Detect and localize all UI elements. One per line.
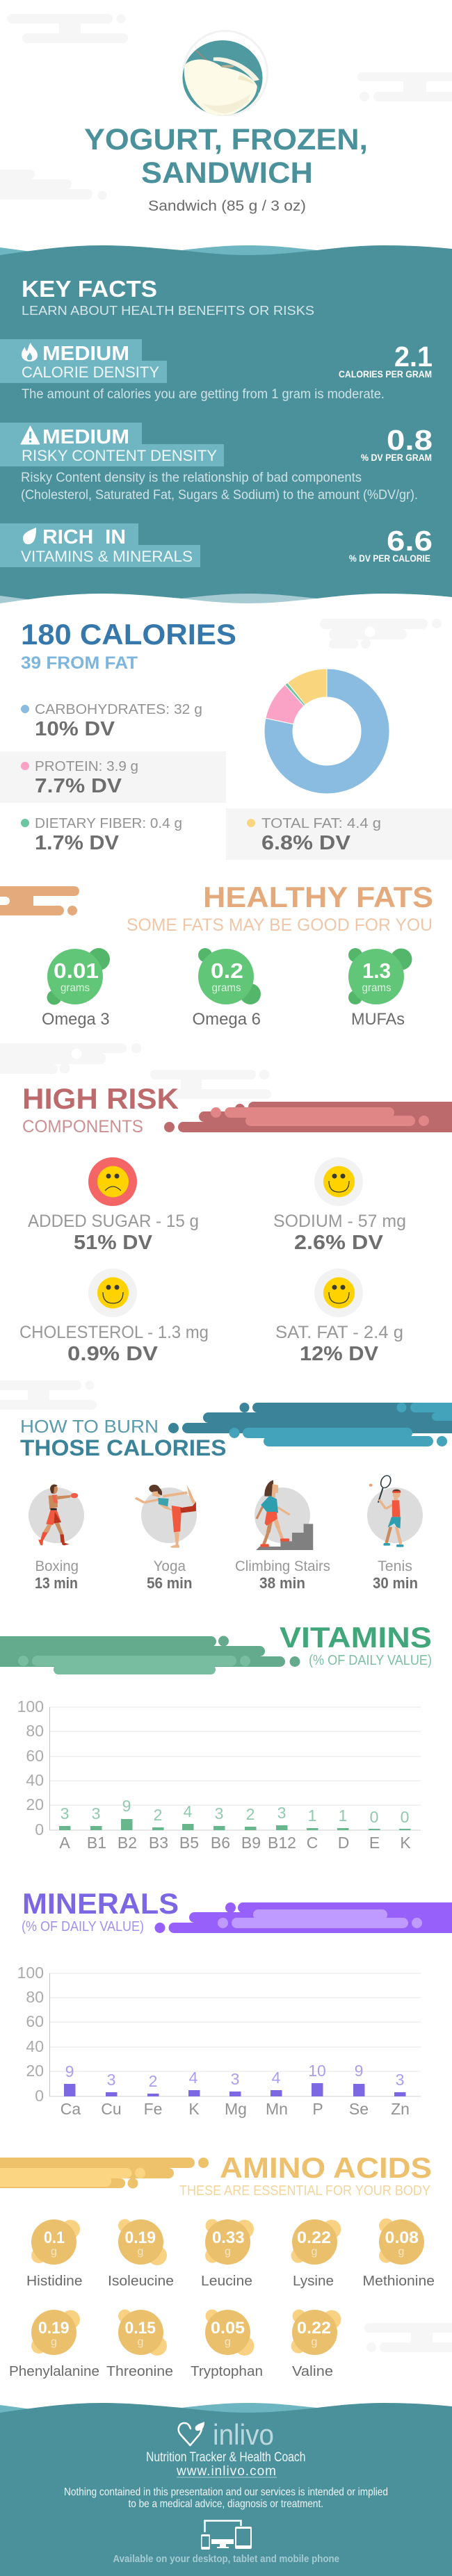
disclaimer (64, 2486, 388, 2510)
fact: calorie density: MEDIUM (42, 343, 129, 365)
panel: key facts (0, 245, 452, 616)
serving size: Sandwich (85 g / 3 oz) (148, 198, 306, 214)
bar chart: minerals: Fe (144, 2100, 162, 2118)
panel: minerals (17, 1887, 452, 2118)
bar chart: minerals: Ca (60, 2100, 81, 2118)
risk: saturated fat: 12% DV (300, 1343, 379, 1365)
bar chart: minerals: Se (349, 2100, 369, 2118)
calories heading: 39 FROM FAT (21, 653, 138, 673)
stat: omega 6 (192, 948, 261, 1029)
activity: boxing (29, 1484, 84, 1592)
stat: omega 6: 0.2 (211, 959, 243, 983)
icon: boxer (38, 1484, 78, 1545)
fact: rich in vitamins and minerals: RICH IN (42, 526, 126, 548)
key facts heading (22, 276, 314, 318)
bar chart: minerals: 2 (149, 2072, 157, 2090)
bar chart: minerals: 9 (355, 2062, 363, 2080)
components subheading: COMPONENTS (22, 1117, 143, 1136)
legend: total fat (226, 808, 452, 860)
minerals subheading: (% OF DAILY VALUE) (22, 1919, 144, 1934)
fact: rich in vitamins and minerals: VITAMINS & MINERALS (21, 548, 193, 565)
bar chart: vitamins: 100 (17, 1697, 44, 1715)
amino: leucine: 0.33 (212, 2228, 245, 2247)
decorative red banner (164, 1102, 452, 1132)
icon: leaf (23, 528, 36, 544)
activity: boxing: Boxing (35, 1558, 79, 1574)
risk: added sugar (28, 1157, 199, 1254)
amino: methionine: g (398, 2246, 404, 2258)
amino: tryptophan: g (225, 2336, 231, 2348)
amino: isoleucine (108, 2219, 174, 2289)
bar chart: vitamins: B5 (179, 1834, 199, 1852)
icon: stair climber (256, 1480, 313, 1550)
amino: tryptophan (191, 2309, 263, 2379)
decorative orange banner (0, 886, 79, 915)
legend: protein (0, 751, 226, 803)
bar chart: vitamins: 4 (184, 1802, 193, 1820)
bar chart: minerals: 4 (272, 2069, 281, 2087)
amino: valine: 0.22 (297, 2319, 331, 2338)
bar chart: minerals: 3 (107, 2071, 115, 2089)
bar chart: minerals: Cu (101, 2100, 122, 2118)
panel: how to burn those calories (20, 1403, 452, 1592)
fact: calorie density: CALORIE DENSITY (22, 364, 159, 381)
amino: leucine: Leucine (201, 2273, 252, 2289)
bar chart: vitamins (17, 1697, 421, 1852)
fact: calorie density: CALORIES PER GRAM (339, 369, 432, 380)
disclaimer: Nothing contained in this presentation and our services is intended or implied (64, 2486, 388, 2498)
calories heading (21, 618, 236, 673)
amino: valine (291, 2309, 341, 2379)
amino: methionine (363, 2219, 435, 2289)
fact: risky content density: % DV PER GRAM (361, 453, 432, 463)
bar chart: vitamins: 1 (308, 1807, 316, 1825)
activity: climbing stairs (235, 1480, 330, 1592)
availability note: Available on your desktop, tablet and mobile phone (113, 2553, 339, 2565)
amino: threonine: g (138, 2336, 143, 2348)
risk: cholesterol (19, 1269, 209, 1365)
amino: valine: g (312, 2336, 317, 2348)
stat: MUFAs (348, 948, 412, 1029)
fact: rich in vitamins and minerals: 6.6 (387, 525, 433, 557)
activity: yoga: 56 min (147, 1574, 192, 1592)
bar chart: minerals: 100 (17, 1964, 44, 1982)
fact: risky content density: 0.8 (387, 424, 433, 456)
food photo: frozen yogurt in a bowl (181, 31, 267, 116)
fact: calorie density (0, 339, 433, 402)
bar chart: vitamins: 3 (92, 1804, 100, 1823)
fact: risky content density (0, 423, 433, 503)
bar chart: vitamins: 20 (26, 1795, 44, 1813)
website link: www.inlivo.com (176, 2464, 276, 2479)
key facts heading: LEARN ABOUT HEALTH BENEFITS OR RISKS (22, 303, 314, 318)
stat: MUFAs: 1.3 (362, 959, 391, 983)
bar chart: vitamins: 3 (60, 1804, 69, 1823)
stat: omega 6: grams (211, 982, 241, 994)
risk: sodium (273, 1157, 406, 1254)
icon: warning triangle (21, 426, 40, 444)
vitamins subheading: (% OF DAILY VALUE) (309, 1653, 432, 1668)
decorative green banner (0, 1636, 300, 1674)
risk: added sugar: 51% DV (74, 1232, 153, 1254)
legend: dietary fiber: 1.7% DV (35, 832, 120, 854)
amino: tryptophan: 0.05 (211, 2319, 245, 2338)
amino: threonine (106, 2309, 173, 2379)
amino: threonine: Threonine (106, 2363, 173, 2379)
risk: added sugar: ADDED SUGAR - 15 g (28, 1212, 199, 1231)
activity: yoga (136, 1485, 197, 1592)
fact: risky content density: (Cholesterol, Saturated Fat, Sugars & Sodium) to the amount (%DV/gr). (21, 488, 418, 503)
panel: amino acids (0, 2151, 435, 2379)
bar chart: minerals: Mn (266, 2100, 288, 2118)
icon: inlivo heart logo (179, 2422, 204, 2445)
bar chart: vitamins: E (369, 1834, 380, 1852)
risk: cholesterol: 0.9% DV (67, 1343, 159, 1365)
risk: saturated fat: SAT. FAT - 2.4 g (275, 1323, 403, 1342)
bar chart: minerals: 10 (308, 2062, 326, 2080)
amino: methionine: 0.08 (385, 2228, 419, 2247)
bar chart: minerals: 9 (65, 2062, 74, 2080)
bar chart: vitamins: D (338, 1834, 349, 1852)
brand name: inlivo (213, 2418, 274, 2451)
key facts heading: KEY FACTS (22, 276, 157, 302)
amino: histidine: Histidine (26, 2273, 82, 2289)
footer wave background (0, 2403, 452, 2576)
bar chart: vitamins: 80 (26, 1722, 44, 1740)
bar chart: vitamins: 0 (370, 1808, 378, 1826)
bar chart: vitamins: 1 (339, 1807, 347, 1825)
legend: protein: 7.7% DV (35, 775, 122, 797)
legend: carbohydrates: 10% DV (35, 718, 115, 740)
bar chart: vitamins: A (59, 1834, 70, 1852)
bar chart: minerals: 3 (231, 2070, 239, 2088)
activity: boxing: 13 min (35, 1574, 78, 1592)
icon: desktop, tablet and phone (201, 2520, 252, 2550)
vitamins heading: VITAMINS (280, 1621, 432, 1654)
stat: omega 3 (42, 948, 110, 1029)
activity: climbing stairs: 38 min (259, 1574, 305, 1592)
amino: lysine (291, 2219, 341, 2289)
burn heading: THOSE CALORIES (20, 1435, 227, 1460)
panel: vitamins (0, 1621, 432, 1852)
amino: phenylalanine (9, 2310, 99, 2379)
amino: tryptophan: Tryptophan (191, 2363, 263, 2379)
fact: calorie density: The amount of calories you are getting from 1 gram is moderate. (22, 387, 385, 402)
bar chart: minerals: 3 (396, 2071, 404, 2089)
minerals heading: MINERALS (22, 1887, 179, 1920)
calories heading: 180 CALORIES (21, 618, 236, 651)
bar chart: vitamins: 2 (154, 1806, 162, 1824)
bar chart: vitamins: 40 (26, 1771, 44, 1789)
risk: cholesterol: CHOLESTEROL - 1.3 mg (19, 1323, 209, 1342)
healthy fats heading: HEALTHY FATS (203, 881, 433, 913)
bar chart: vitamins: 9 (122, 1797, 131, 1815)
risk: sodium: 2.6% DV (294, 1232, 384, 1254)
bar chart: vitamins: B3 (149, 1834, 168, 1852)
bar chart: minerals: Zn (391, 2100, 410, 2118)
legend: total fat: TOTAL FAT: 4.4 g (261, 816, 381, 831)
icon: flame (22, 343, 38, 361)
bar chart: minerals: 20 (26, 2062, 44, 2080)
stat: omega 3: Omega 3 (42, 1010, 110, 1029)
legend: dietary fiber (21, 816, 182, 854)
bar chart: minerals: P (312, 2100, 323, 2118)
panel: high risk components (19, 1082, 452, 1365)
bar chart: vitamins: B2 (118, 1834, 137, 1852)
bar chart: minerals (17, 1964, 421, 2118)
stat: omega 3: grams (60, 982, 90, 994)
legend: carbohydrates: CARBOHYDRATES: 32 g (35, 702, 202, 717)
bar chart: minerals: 4 (189, 2069, 198, 2087)
fact: risky content density: MEDIUM (42, 426, 129, 448)
amino: histidine: g (51, 2246, 57, 2258)
legend: protein: PROTEIN: 3.9 g (35, 759, 138, 774)
bar chart: vitamins: K (400, 1834, 411, 1852)
bottom wave (0, 594, 452, 616)
amino: isoleucine: Isoleucine (108, 2273, 174, 2289)
bar chart: vitamins: 60 (26, 1747, 44, 1765)
bar chart: minerals: 60 (26, 2012, 44, 2030)
amino: lysine: 0.22 (297, 2228, 331, 2247)
activity: yoga: Yoga (153, 1558, 186, 1574)
healthy fats subheading: SOME FATS MAY BE GOOD FOR YOU (127, 915, 433, 935)
risk: sodium: SODIUM - 57 mg (273, 1212, 406, 1231)
bar chart: vitamins: B9 (241, 1834, 261, 1852)
burn heading: HOW TO BURN (20, 1416, 159, 1437)
tagline: Nutrition Tracker & Health Coach (146, 2450, 306, 2465)
decorative purple banner (154, 1902, 452, 1933)
amino acids heading: AMINO ACIDS (220, 2151, 432, 2184)
bar chart: vitamins: 3 (277, 1804, 286, 1822)
bar chart: minerals: 40 (26, 2037, 44, 2055)
legend: carbohydrates (21, 702, 202, 740)
disclaimer: to be a medical advice, diagnosis or treatment. (128, 2498, 323, 2510)
amino: lysine: Lysine (293, 2273, 334, 2289)
fact: rich in vitamins and minerals: % DV PER CALORIE (349, 553, 430, 564)
bar chart: minerals: 0 (35, 2087, 44, 2105)
amino: histidine: 0.1 (44, 2228, 65, 2247)
stat: MUFAs: MUFAs (351, 1010, 405, 1029)
decorative teal banner (168, 1403, 452, 1446)
decorative yellow banner (0, 2158, 209, 2188)
amino: leucine: g (225, 2246, 231, 2258)
bar chart: minerals: K (188, 2100, 200, 2118)
amino: isoleucine: 0.19 (125, 2228, 156, 2247)
amino: lysine: g (312, 2246, 317, 2258)
amino: leucine (201, 2219, 254, 2289)
icon: yoga pose (136, 1485, 196, 1548)
bar chart: vitamins: B12 (268, 1834, 296, 1852)
bar chart: minerals: 80 (26, 1988, 44, 2006)
amino acids subheading: THESE ARE ESSENTIAL FOR YOUR BODY (179, 2183, 430, 2199)
amino: threonine: 0.15 (125, 2319, 156, 2338)
donut chart (264, 669, 389, 794)
activity: tennis (367, 1475, 423, 1592)
amino: phenylalanine: g (51, 2336, 57, 2348)
stat: MUFAs: grams (362, 982, 391, 994)
activity: tennis: Tenis (378, 1558, 412, 1574)
bar chart: vitamins: C (307, 1834, 318, 1852)
title (84, 123, 368, 190)
stat: omega 3: 0.01 (54, 959, 99, 983)
icon: tennis player (369, 1475, 403, 1547)
fact: calorie density: 2.1 (394, 341, 433, 373)
title: SANDWICH (141, 156, 313, 190)
fact: risky content density: Risky Content density is the relationship of bad components (21, 471, 362, 485)
panel: footer (0, 2403, 452, 2576)
amino: isoleucine: g (138, 2246, 143, 2258)
bar chart: vitamins: 0 (401, 1808, 409, 1826)
activity: tennis: 30 min (373, 1574, 418, 1592)
bar chart: vitamins: 2 (246, 1805, 255, 1823)
burn heading (20, 1416, 227, 1460)
bar chart: vitamins: 3 (215, 1804, 223, 1823)
activity: climbing stairs: Climbing Stairs (235, 1558, 330, 1574)
panel: calories (0, 618, 452, 860)
teal wave header (0, 245, 452, 601)
bar chart: minerals: Mg (225, 2100, 247, 2118)
high risk heading: HIGH RISK (22, 1082, 179, 1115)
bar chart: vitamins: B6 (211, 1834, 230, 1852)
amino: phenylalanine: 0.19 (38, 2319, 70, 2338)
legend: dietary fiber: DIETARY FIBER: 0.4 g (35, 816, 182, 831)
bar chart: vitamins: 0 (35, 1820, 44, 1839)
fact: risky content density: RISKY CONTENT DENSITY (22, 447, 217, 464)
amino: methionine: Methionine (363, 2273, 435, 2289)
fact: rich in vitamins and minerals (0, 523, 433, 567)
bar chart: vitamins: B1 (87, 1834, 106, 1852)
amino: histidine (26, 2219, 82, 2289)
title: YOGURT, FROZEN, (84, 123, 368, 156)
stat: omega 6: Omega 6 (192, 1010, 261, 1029)
panel: healthy fats (0, 881, 433, 1029)
amino: phenylalanine: Phenylalanine (9, 2363, 99, 2379)
legend: total fat: 6.8% DV (261, 832, 351, 854)
risk: saturated fat (275, 1269, 403, 1365)
amino: valine: Valine (292, 2363, 333, 2379)
